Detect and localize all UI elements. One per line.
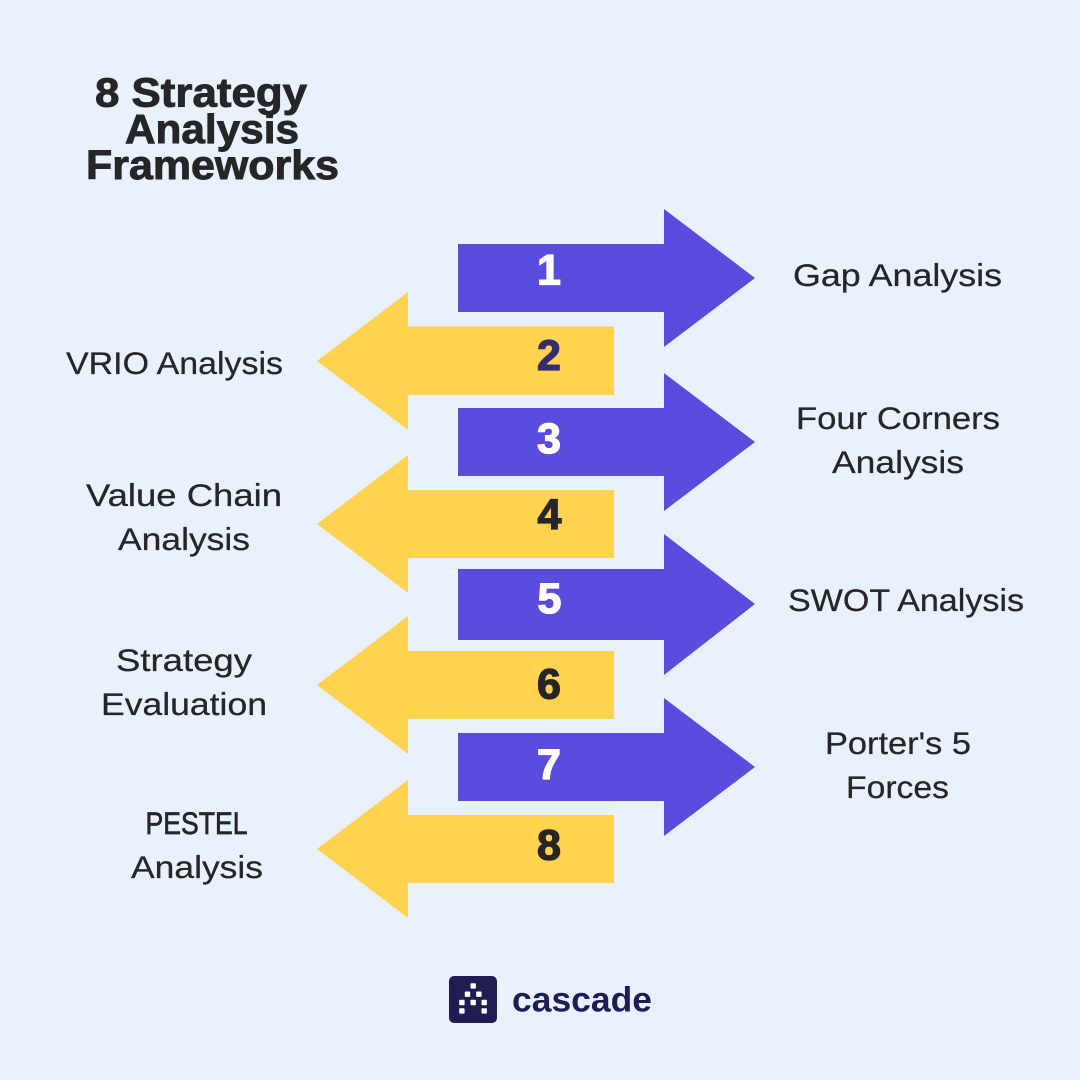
arrow 8: PESTEL Analysis xyxy=(317,780,614,918)
cascade logo xyxy=(449,976,652,1023)
title: 8 Strategy xyxy=(95,70,307,116)
icon: cascade mark xyxy=(449,976,497,1023)
label: Porter's 5 Forces xyxy=(825,725,971,805)
label: Gap Analysis: Gap Analysis xyxy=(793,257,1002,293)
label: PESTEL Analysis xyxy=(131,805,263,885)
arrow 7: Porter's 5 Forces: 7 xyxy=(537,741,561,789)
arrow 1: Gap Analysis xyxy=(458,209,755,347)
label: SWOT Analysis: SWOT Analysis xyxy=(788,582,1024,618)
label: Four Corners Analysis: Four Corners xyxy=(796,400,1000,436)
wordmark: cascade xyxy=(512,980,652,1020)
label: Value Chain Analysis: Analysis xyxy=(118,521,250,557)
arrow 1: Gap Analysis: 1 xyxy=(537,246,561,294)
arrow 6: Strategy Evaluation xyxy=(317,616,614,754)
label: VRIO Analysis: VRIO Analysis xyxy=(66,345,283,381)
arrow 8: PESTEL Analysis: 8 xyxy=(537,822,561,870)
arrow 4: Value Chain Analysis: 4 xyxy=(538,491,562,539)
arrow 3: Four Corners Analysis xyxy=(458,373,755,511)
arrow 6: Strategy Evaluation: 6 xyxy=(537,660,561,708)
label: PESTEL Analysis: PESTEL xyxy=(146,805,248,841)
arrow 5: SWOT Analysis xyxy=(458,534,755,675)
label: Four Corners Analysis xyxy=(796,400,1000,480)
label: Four Corners Analysis: Analysis xyxy=(832,444,964,480)
label: Strategy Evaluation: Evaluation xyxy=(101,686,267,722)
arrow 2: VRIO Analysis xyxy=(317,292,614,430)
arrow 7: Porter's 5 Forces xyxy=(458,698,755,836)
label: Strategy Evaluation xyxy=(101,642,267,722)
label: Strategy Evaluation: Strategy xyxy=(116,642,252,678)
title: Analysis xyxy=(125,106,299,152)
title xyxy=(86,70,339,188)
arrow 2: VRIO Analysis: 2 xyxy=(537,332,561,380)
label: Value Chain Analysis: Value Chain xyxy=(86,477,282,513)
arrow 4: Value Chain Analysis xyxy=(317,455,614,593)
label: Value Chain Analysis xyxy=(86,477,282,557)
label: Porter's 5 Forces: Forces xyxy=(846,769,949,805)
arrow 5: SWOT Analysis: 5 xyxy=(538,575,561,623)
label: PESTEL Analysis: Analysis xyxy=(131,849,263,885)
arrow 3: Four Corners Analysis: 3 xyxy=(537,415,561,463)
label: Porter's 5 Forces: Porter's 5 xyxy=(825,725,971,761)
title: Frameworks xyxy=(86,142,339,188)
